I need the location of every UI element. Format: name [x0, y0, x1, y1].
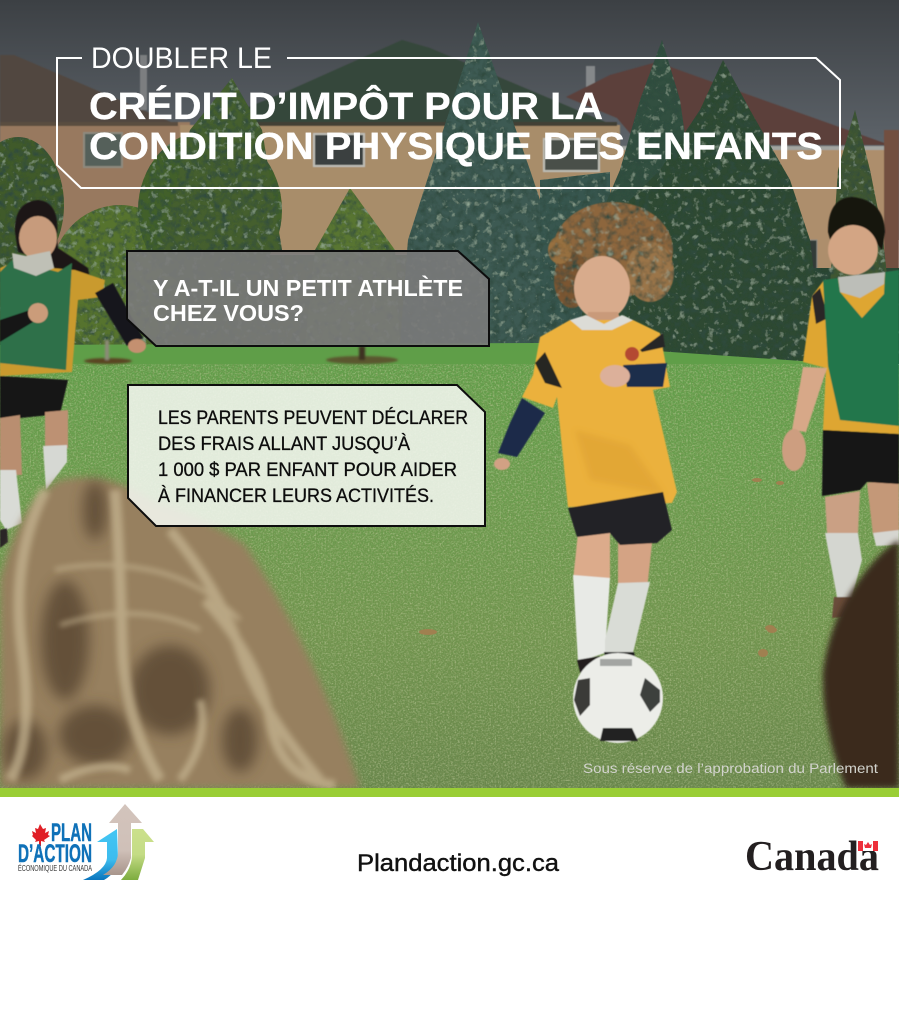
right foreground dark hair — [823, 540, 899, 788]
logo wordmark: PLAN — [51, 819, 92, 847]
callout: explanation: LES PARENTS PEUVENT DÉCLARER — [158, 408, 468, 429]
green divider bar — [0, 788, 899, 797]
hair shadows — [3, 480, 258, 780]
grass highlights — [0, 364, 899, 788]
callout: question — [127, 251, 489, 346]
trees — [0, 22, 899, 364]
socks — [573, 575, 610, 662]
title eyebrow: DOUBLER LE — [91, 42, 272, 75]
center player with ball — [494, 202, 677, 743]
left foreground blonde hair — [0, 478, 360, 788]
right player — [782, 197, 899, 618]
small tree trunks and mulch — [84, 340, 398, 364]
legs — [573, 533, 610, 580]
right sleeve — [623, 363, 667, 387]
shoes — [576, 656, 600, 673]
logo: Plan d'action économique du Canada: D’ACTION — [18, 840, 92, 868]
icon: green arrow — [121, 829, 154, 880]
callout: question: Y A-T-IL UN PETIT ATHLÈTE — [153, 274, 463, 301]
collar — [570, 315, 633, 330]
icon: blue arrow — [83, 829, 118, 880]
title line 1: CRÉDIT D’IMPÔT POUR LA — [89, 83, 603, 128]
jersey folds — [580, 435, 656, 490]
callout: explanation: DES FRAIS ALLANT JUSQU’À — [158, 434, 410, 455]
jersey — [522, 320, 677, 507]
callout: explanation — [128, 385, 485, 526]
callout: explanation: À FINANCER LEURS ACTIVITÉS. — [158, 486, 434, 507]
jersey black patches — [535, 352, 562, 388]
title line 2: CONDITION PHYSIQUE DES ENFANTS — [89, 126, 823, 168]
icon: maple leaf — [32, 824, 50, 846]
background photo: children playing soccer — [0, 0, 899, 788]
Canada wordmark: Canada — [745, 834, 879, 880]
shorts — [568, 492, 672, 545]
sky — [0, 0, 899, 240]
crest — [625, 347, 639, 361]
curly hair — [548, 202, 674, 308]
lawn — [0, 343, 899, 788]
title frame — [57, 42, 840, 188]
fallen leaves — [419, 478, 784, 657]
hair highlights — [10, 490, 335, 785]
icon: grey arrow — [103, 804, 142, 875]
icon: Canadian flag — [858, 841, 878, 851]
grass texture — [0, 364, 899, 788]
website URL: Plandaction.gc.ca — [357, 850, 560, 877]
soccer ball — [573, 653, 663, 743]
logo: Plan d'action économique du Canada: ÉCONOMIQUE DU CANADA — [18, 864, 92, 873]
logo: Plan d'action économique du Canada — [18, 804, 154, 880]
houses — [0, 40, 899, 280]
approval note: Sous réserve de l’approbation du Parlement — [583, 761, 878, 776]
callout: question: CHEZ VOUS? — [153, 300, 304, 326]
left sleeve — [498, 398, 545, 457]
callout: explanation: 1 000 $ PAR ENFANT POUR AIDER — [158, 460, 457, 481]
face — [574, 256, 630, 320]
left player — [0, 200, 146, 548]
